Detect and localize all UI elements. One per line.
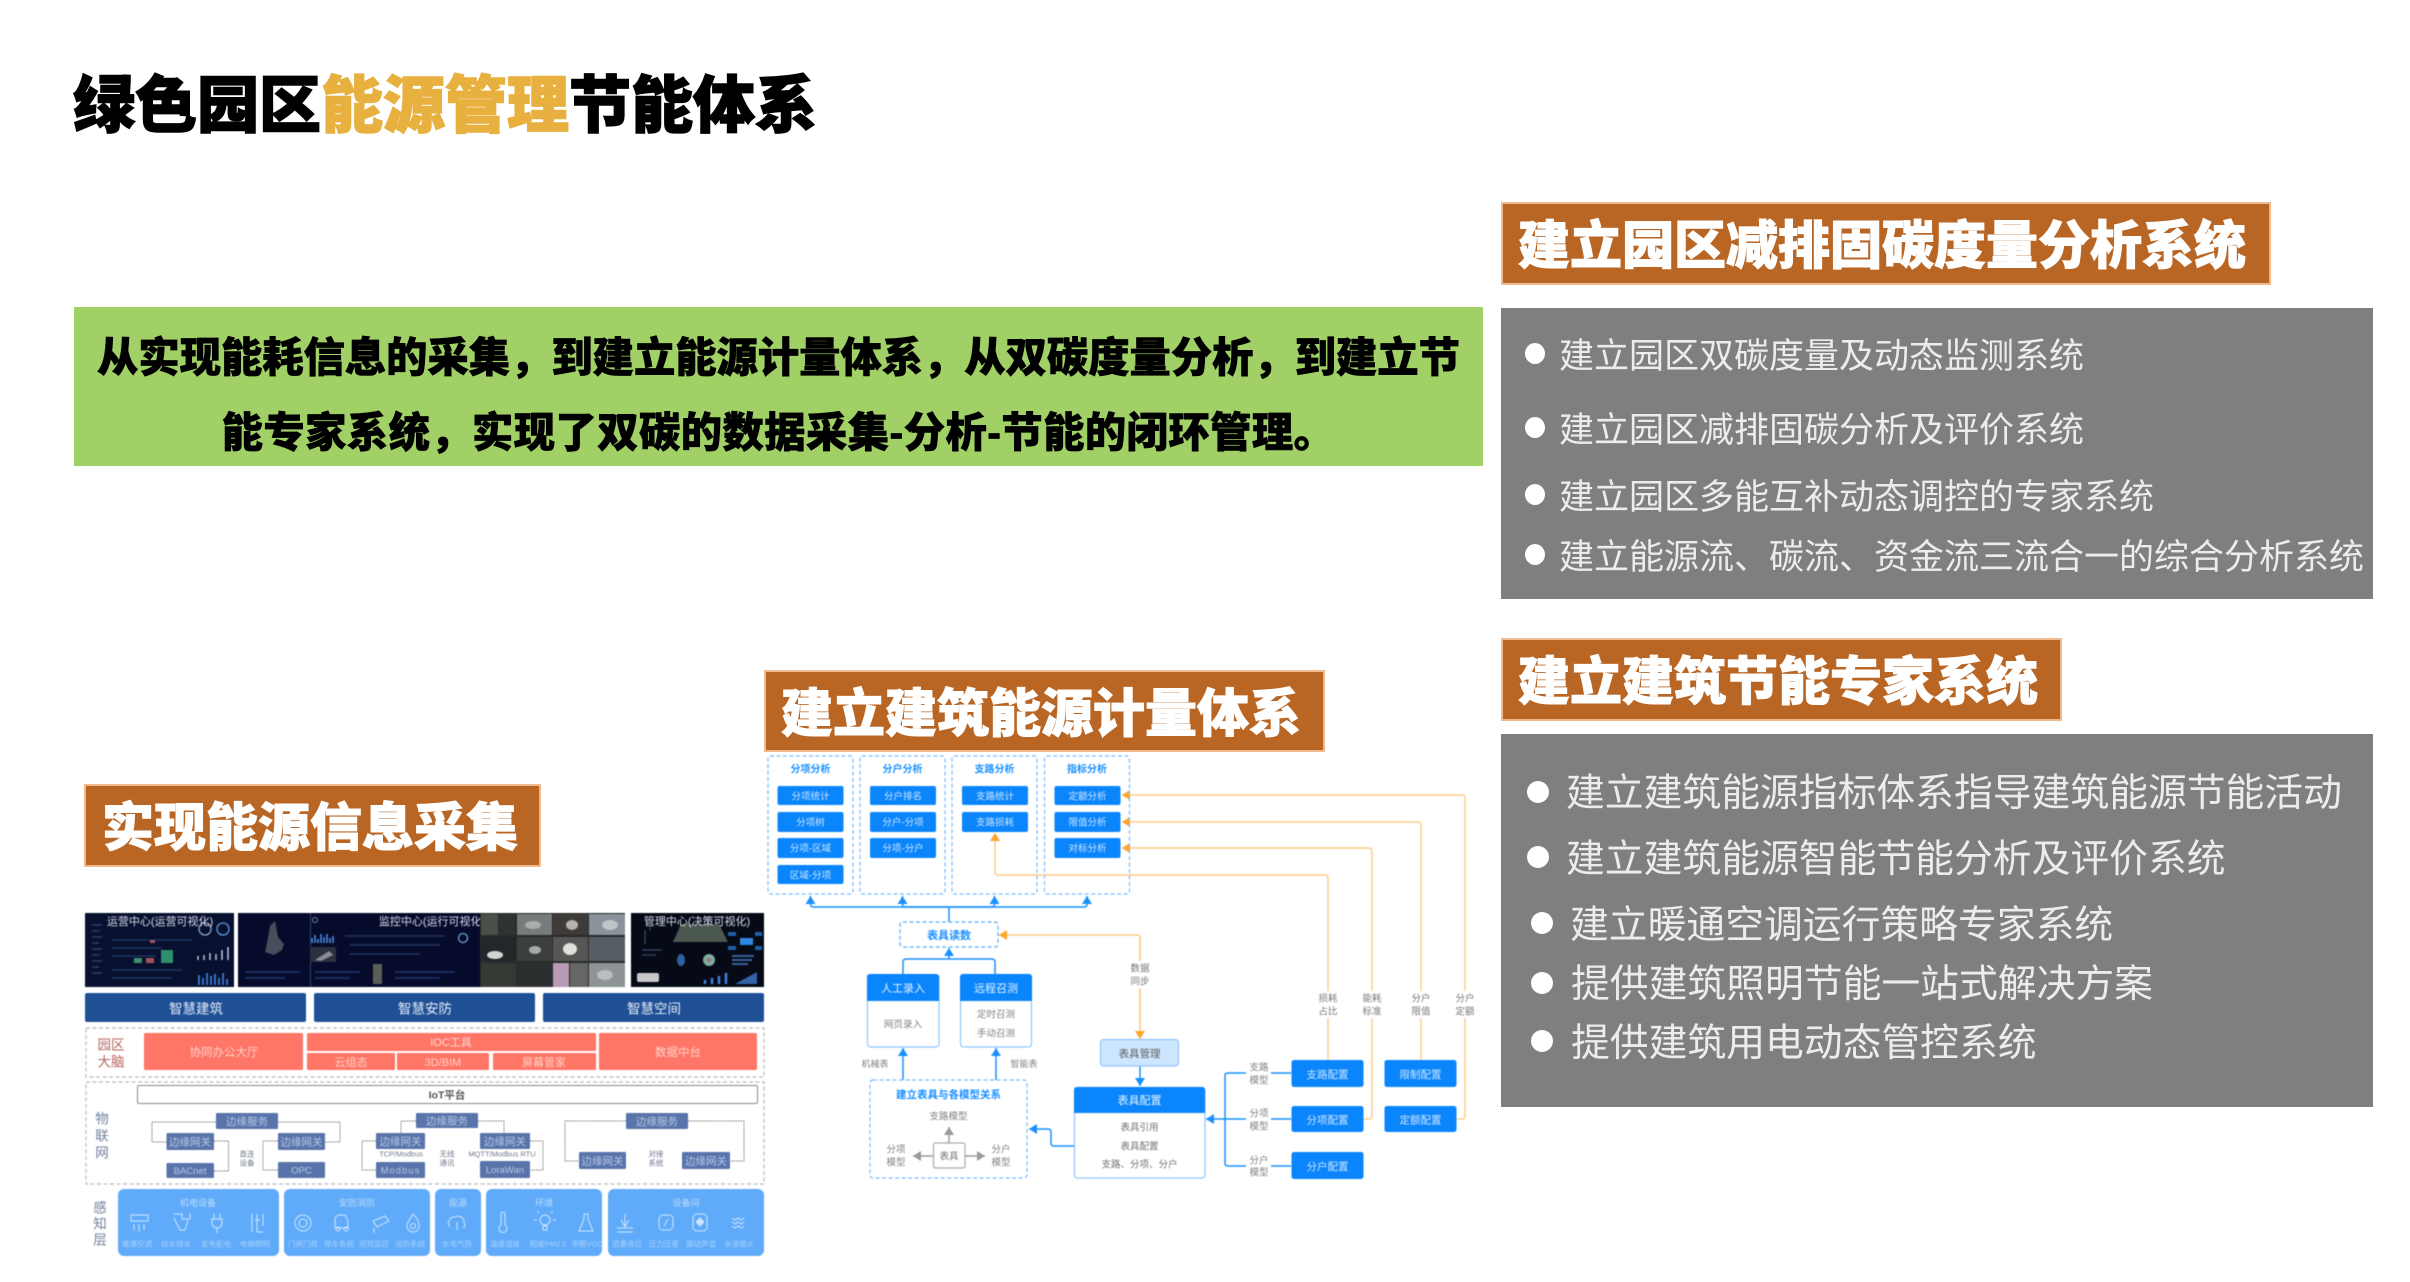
- orange line labels: 限值: [1411, 1006, 1431, 1018]
- icon: light bulb: [534, 1211, 556, 1230]
- layer: internet of things: 边缘网关: [380, 1135, 422, 1148]
- summary text: 从实现能耗信息的采集，到建立能源计量体系，从双碳度量分析，到建立节: [97, 335, 1460, 381]
- layer: campus brain: IOC工具: [430, 1036, 472, 1049]
- orange line labels: 定额: [1455, 1006, 1475, 1018]
- layer: campus brain: 园区: [98, 1038, 124, 1052]
- manual entry card: [867, 974, 939, 1047]
- analysis button labels: 分户排名: [884, 790, 922, 802]
- application bar: smart security: [314, 993, 535, 1022]
- meter config card: 表具引用: [1120, 1122, 1159, 1134]
- column titles: [790, 762, 1107, 776]
- configuration buttons: 分户配置: [1306, 1160, 1348, 1173]
- layer: internet of things: IoT平台: [429, 1088, 465, 1102]
- model labels: 模型: [1249, 1166, 1269, 1178]
- analysis button labels: 分户-分项: [882, 816, 924, 828]
- icon: thermometer: [499, 1212, 507, 1232]
- screen: management center: [631, 913, 764, 987]
- analysis button labels: 支路统计: [976, 790, 1014, 802]
- icon: fire: [407, 1214, 419, 1232]
- blue arrows: readings to analysis: [810, 896, 1291, 1166]
- analysis buttons: [778, 786, 1120, 884]
- icon: flask: [579, 1214, 593, 1231]
- configuration buttons: 定额配置: [1400, 1114, 1442, 1126]
- analysis button labels: 支路损耗: [976, 816, 1014, 828]
- layer: sensing: 停车系统: [324, 1238, 354, 1248]
- heading: building expert system: [1501, 638, 2062, 721]
- meter config card: 表具配置: [1120, 1140, 1159, 1152]
- analysis button labels: 定额分析: [1068, 790, 1107, 802]
- bullet: [1525, 544, 1545, 565]
- layer: internet of things: 边缘服务: [226, 1115, 268, 1128]
- layer: internet of things: LoraWan: [486, 1165, 524, 1176]
- layer: sensing: 压力压差: [649, 1238, 679, 1248]
- analysis button labels: [790, 790, 1107, 882]
- screen: monitoring center: 监控中心(运行可视化): [379, 914, 485, 928]
- analysis button labels: 分项-区域: [790, 842, 832, 854]
- layer: internet of things: 边缘网关: [484, 1135, 526, 1148]
- model labels: 支路: [1249, 1062, 1269, 1074]
- bullet: [1531, 972, 1553, 994]
- layer: internet of things: 无线: [440, 1148, 455, 1158]
- list item: 建立能源流、碳流、资金流三流合一的综合分析系统: [1559, 538, 2364, 577]
- analysis button labels: 区域-分项: [790, 870, 832, 882]
- layer: sensing: 机电设备: [180, 1197, 216, 1208]
- icon: car: [335, 1215, 348, 1231]
- meter reading node: 表具读数: [927, 928, 971, 942]
- meter reading node: [900, 922, 998, 947]
- icon: fingerprint gate: [295, 1215, 311, 1231]
- layer: internet of things: 直连: [240, 1148, 255, 1158]
- bullet: [1531, 1030, 1553, 1052]
- bullet: [1531, 912, 1553, 934]
- layer: internet of things: 网: [95, 1146, 109, 1160]
- manual entry card: 人工录入: [881, 982, 925, 995]
- model relation box: 模型: [991, 1156, 1011, 1168]
- model labels: 模型: [1249, 1074, 1269, 1086]
- orange line labels: [1130, 961, 1476, 1018]
- layer: sensing: 流量液位: [612, 1238, 642, 1248]
- layer: internet of things: 通讯: [440, 1158, 455, 1168]
- icon: power plug: [212, 1214, 222, 1233]
- analysis button labels: 分项统计: [791, 790, 830, 802]
- orange line labels: 分户: [1455, 992, 1475, 1004]
- layer: sensing: 照度PM2.5: [530, 1238, 566, 1248]
- layer: sensing: [93, 1189, 764, 1256]
- list item: 建立园区减排固碳分析及评价系统: [1559, 411, 2084, 450]
- model labels: [1249, 1062, 1269, 1178]
- screen: management center: 管理中心(决策可视化): [644, 914, 750, 928]
- analysis button labels: 限值分析: [1068, 816, 1107, 828]
- summary banner: [74, 307, 1483, 466]
- model relation box: 建立表具与各模型关系: [896, 1088, 1001, 1101]
- icon: water leak: [732, 1218, 744, 1228]
- layer: sensing: 环境: [535, 1197, 553, 1208]
- layer: sensing: 知: [93, 1216, 107, 1232]
- layer: sensing: 水电气热: [442, 1238, 472, 1248]
- icon: pressure gauge: [659, 1215, 673, 1230]
- orange data flow lines: [995, 795, 1465, 1119]
- meter config card: 支路、分项、分户: [1101, 1158, 1178, 1170]
- heading: carbon analysis system: [1501, 202, 2271, 285]
- orange line labels: 损耗: [1318, 992, 1338, 1004]
- layer: campus brain: [86, 1028, 764, 1077]
- panel: building expert list: [1501, 734, 2373, 1107]
- application bar: smart space: [543, 993, 764, 1022]
- layer: internet of things: 边缘服务: [636, 1115, 678, 1128]
- layer: sensing: 震动声音: [686, 1238, 716, 1248]
- meter config card: [1074, 1087, 1205, 1178]
- title: 绿色园区能源管理节能体系: [73, 72, 817, 141]
- summary text: [97, 335, 1460, 456]
- layer: internet of things: 系统: [648, 1158, 664, 1168]
- remote reading card: 远程召测: [974, 982, 1018, 995]
- layer: internet of things: [86, 1082, 764, 1184]
- heading: building expert system: 建立建筑节能专家系统: [1518, 654, 2038, 712]
- layer: internet of things: 边缘网关: [169, 1136, 211, 1148]
- orange line labels: 标准: [1362, 1006, 1382, 1018]
- layer: internet of things: 对接: [648, 1148, 664, 1158]
- meter type labels: [861, 1058, 1038, 1069]
- bullet: [1525, 484, 1545, 505]
- analysis button labels: 分项-分户: [882, 842, 924, 854]
- orange line labels: 数据: [1130, 962, 1150, 974]
- layer: sensing: 甲醛VOC: [571, 1238, 603, 1248]
- panel: carbon analysis list: [1501, 308, 2373, 599]
- layer: internet of things: 联: [95, 1128, 109, 1144]
- layer: campus brain: 大脑: [98, 1054, 124, 1070]
- layer: internet of things: OPC: [291, 1166, 312, 1176]
- layer: campus brain: 协同办公大厅: [190, 1045, 258, 1059]
- layer: sensing: 消防系统: [395, 1238, 425, 1248]
- bullet: [1527, 846, 1549, 868]
- icon: water level: [617, 1214, 633, 1232]
- diagram: energy metering system: [768, 756, 1476, 1179]
- model relation box: 分项: [886, 1144, 906, 1156]
- model labels: 分项: [1249, 1108, 1269, 1120]
- orange line labels: 能耗: [1362, 992, 1382, 1004]
- meter management node: [1100, 1040, 1178, 1066]
- icon: utility cloud: [448, 1216, 465, 1230]
- icon: sound sensor: [693, 1214, 707, 1231]
- layer: internet of things: 边缘网关: [280, 1136, 323, 1148]
- orange line labels: 分户: [1411, 992, 1431, 1004]
- meter type labels: 智能表: [1010, 1058, 1038, 1069]
- model relation box: 模型: [886, 1156, 906, 1168]
- analysis columns: [768, 756, 1130, 894]
- list item: 建立园区多能互补动态调控的专家系统: [1559, 478, 2154, 517]
- heading: carbon analysis system: 建立园区减排固碳度量分析系统: [1518, 218, 2246, 276]
- icon: camera: [373, 1216, 389, 1233]
- analysis button labels: 对标分析: [1068, 842, 1107, 854]
- orange line labels: 占比: [1318, 1006, 1338, 1018]
- column titles: 支路分析: [974, 762, 1014, 776]
- layer: internet of things: BACnet: [174, 1166, 207, 1177]
- column titles: 分户分析: [882, 762, 922, 776]
- column titles: 指标分析: [1067, 762, 1107, 776]
- list item: 建立建筑能源指标体系指导建筑能源节能活动: [1566, 772, 2342, 815]
- bullet: [1525, 417, 1545, 438]
- icon: air conditioner: [131, 1215, 148, 1232]
- layer: internet of things: 边缘服务: [426, 1114, 468, 1128]
- configuration buttons: 限制配置: [1400, 1068, 1442, 1081]
- remote reading card: 定时召测: [977, 1008, 1015, 1020]
- meter management node: 表具管理: [1118, 1047, 1161, 1060]
- orange line labels: 同步: [1130, 976, 1150, 988]
- analysis button labels: 分项树: [796, 816, 825, 828]
- layer: sensing: 温度湿度: [490, 1238, 520, 1248]
- layer: sensing: 暖通空调: [122, 1238, 152, 1248]
- heading: metering system: 建立建筑能源计量体系: [781, 686, 1301, 744]
- model labels: 模型: [1249, 1120, 1269, 1132]
- bullet: [1527, 781, 1549, 803]
- column titles: 分项分析: [790, 762, 830, 776]
- layer: internet of things: 边缘网关: [582, 1154, 624, 1168]
- application bar: smart space: 智慧空间: [627, 1002, 681, 1016]
- layer: sensing: 层: [93, 1232, 107, 1248]
- layer: sensing: 能源: [449, 1197, 467, 1208]
- layer: internet of things: 设备: [240, 1158, 255, 1168]
- model relation box: 支路模型: [929, 1110, 968, 1122]
- screen: operations center: [85, 913, 234, 987]
- icon: water pipe: [174, 1213, 190, 1230]
- layer: sensing: 变电配电: [201, 1238, 231, 1248]
- diagram: energy data collection architecture: [85, 913, 764, 1256]
- screen: camera wall: [480, 913, 625, 987]
- layer: campus brain: 屏幕管家: [522, 1055, 566, 1069]
- layer: internet of things: TCP/Modbus: [379, 1150, 423, 1158]
- layer: campus brain: 数据中台: [655, 1045, 701, 1059]
- layer: internet of things: 边缘网关: [685, 1154, 727, 1168]
- configuration buttons: [1292, 1060, 1456, 1179]
- heading: energy data collection: 实现能源信息采集: [102, 800, 518, 858]
- remote reading card: 手动召测: [977, 1028, 1015, 1040]
- model relation box: 分户: [991, 1144, 1011, 1156]
- meter config card: 表具配置: [1118, 1093, 1162, 1107]
- model relation box: 表具: [939, 1150, 959, 1162]
- heading: metering system: [764, 670, 1325, 752]
- heading: energy data collection: [84, 784, 541, 867]
- icon: elevator: [252, 1214, 263, 1232]
- layer: sensing: 设备间: [672, 1197, 700, 1208]
- layer: sensing: 感: [93, 1200, 107, 1216]
- list item: 建立暖通空调运行策略专家系统: [1570, 904, 2113, 947]
- bullet: [1525, 343, 1545, 364]
- layer: internet of things: 物: [95, 1112, 109, 1126]
- list item: 建立园区双碳度量及动态监测系统: [1559, 337, 2084, 376]
- application bar: smart building: 智慧建筑: [169, 1002, 223, 1016]
- remote reading card: [960, 974, 1032, 1047]
- layer: sensing: 水浸烟火: [724, 1238, 754, 1248]
- layer: sensing: 安防消防: [339, 1197, 375, 1208]
- layer: internet of things: MQTT/Modbus RTU: [468, 1150, 536, 1158]
- list item: 提供建筑用电动态管控系统: [1571, 1022, 2037, 1065]
- screen: operations center: 运营中心(运营可视化): [107, 914, 213, 928]
- model labels: 分户: [1249, 1154, 1269, 1166]
- summary text: 能专家系统，实现了双碳的数据采集-分析-节能的闭环管理。: [222, 410, 1335, 456]
- configuration buttons: 支路配置: [1306, 1068, 1348, 1081]
- model relation box: [870, 1080, 1027, 1178]
- layer: sensing: 给水排水: [161, 1238, 191, 1248]
- configuration buttons: 分项配置: [1306, 1114, 1348, 1126]
- meter type labels: 机械表: [861, 1058, 889, 1069]
- layer: campus brain: 3D/BIM: [425, 1057, 461, 1069]
- layer: sensing: 电梯照明: [240, 1238, 270, 1248]
- application bar: smart building: [85, 993, 306, 1022]
- list item: 提供建筑照明节能一站式解决方案: [1571, 963, 2153, 1006]
- manual entry card: 网页录入: [884, 1020, 922, 1030]
- screen: monitoring center: [238, 913, 485, 987]
- layer: internet of things: Modbus: [381, 1166, 420, 1176]
- layer: campus brain: 云组态: [334, 1055, 368, 1069]
- list item: 建立建筑能源智能节能分析及评价系统: [1566, 838, 2226, 881]
- layer: sensing: 视频监控: [359, 1238, 389, 1248]
- application bar: smart security: 智慧安防: [398, 1002, 452, 1016]
- layer: sensing: 门闸门禁: [288, 1240, 318, 1248]
